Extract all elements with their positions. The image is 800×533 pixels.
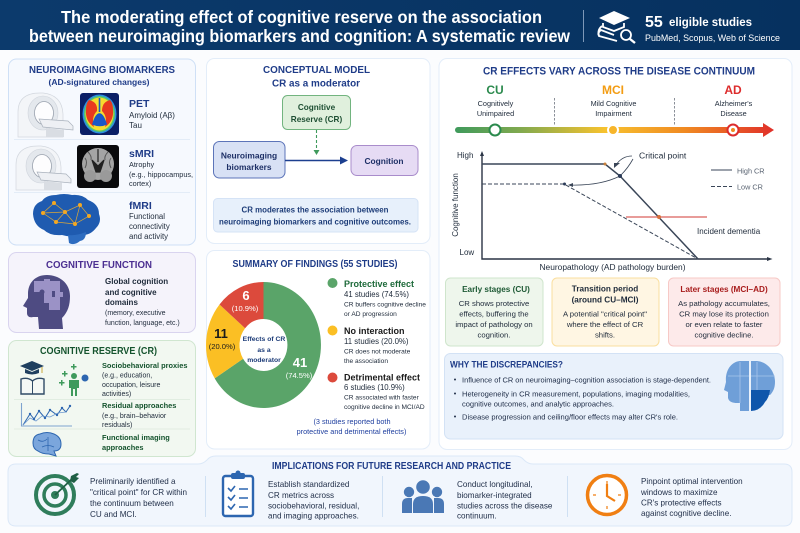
icon: blue brain: [33, 432, 61, 456]
donut chart: (20.0%): [209, 342, 236, 351]
PET label: Amyloid (Aβ): [129, 111, 175, 120]
dashed arrow: [314, 130, 320, 155]
stat: eligible studies: eligible studies: [669, 15, 752, 29]
box: neuroimaging biomarkers: biomarkers: [226, 162, 272, 172]
legend: no interaction: [328, 326, 411, 365]
chart: cognitive function vs neuropathology: Low: [460, 248, 474, 257]
box: neuroimaging biomarkers: [214, 142, 285, 178]
footnote: protective and detrimental effects): [297, 427, 406, 436]
sMRI label: sMRI: [129, 148, 154, 160]
stage labels: CU: [486, 83, 504, 97]
box: later stages: cognitive decline.: [695, 330, 753, 340]
legend: no interaction: the association: [344, 358, 388, 365]
stage labels: Cognitively: [478, 99, 514, 108]
box: later stages: CR may lose its protection: [679, 310, 769, 318]
chart: cognitive function vs neuropathology: Critical point: [639, 150, 687, 160]
box: early stages: impact of pathology on: [455, 320, 533, 329]
chart: cognitive function vs neuropathology: Cognitive function: [451, 173, 460, 237]
text: CR metrics: and imaging approaches.: [268, 512, 359, 520]
bullet list: Disease progression and ceiling/floor effects may alter CR's role.: [462, 412, 678, 422]
icon: person with plus signs: [59, 364, 88, 396]
text: critical point: Preliminarily identified a: [90, 477, 176, 486]
sMRI brain image: [77, 145, 119, 188]
box: transition period: A potential "critical point": [563, 310, 647, 318]
sociobehavioral text: activities): [102, 391, 131, 398]
panel: neuroimaging biomarkers: [8, 59, 196, 245]
PET label: Tau: [129, 121, 142, 130]
text: critical point: CU and MCI.: [90, 510, 137, 519]
heading: IMPLICATIONS FOR FUTURE RESEARCH AND PRACTICE: [272, 461, 511, 472]
panel: disease continuum: [439, 58, 792, 450]
chart: cognitive function vs neuropathology: [451, 150, 772, 272]
box: transition period: where the effect of CR: [566, 320, 644, 329]
text: CR metrics: CR metrics across: [268, 491, 334, 500]
chart: cognitive function vs neuropathology: Incident dementia: [697, 227, 761, 236]
heading: WHY THE DISCREPANCIES?: [450, 360, 563, 370]
cognitive function text: and cognitive: [105, 288, 157, 297]
legend: protective: CR buffers cognitive decline: [344, 302, 426, 308]
donut chart: (10.9%): [232, 304, 259, 313]
legend: protective: [328, 278, 426, 318]
stat: eligible studies: PubMed, Scopus, Web of Science: [645, 33, 780, 43]
text: CR metrics: sociobehavioral, residual,: [268, 502, 359, 510]
stat: eligible studies: 55: [645, 14, 663, 31]
bullet list: cognitive outcomes, and analytic approaches.: [462, 400, 614, 408]
heading: CR EFFECTS VARY ACROSS THE DISEASE CONTINUUM: [483, 66, 755, 78]
panel: cognitive function: [8, 252, 196, 332]
icon: cap and book: [20, 361, 44, 394]
sociobehavioral text: occupation, leisure: [102, 382, 160, 389]
box: cognitive reserve: Reserve (CR): [291, 115, 342, 124]
icon: residual chart: [22, 403, 72, 426]
donut chart: (74.5%): [286, 371, 313, 380]
functional imaging text: approaches: [102, 443, 144, 452]
text: longitudinal studies: Conduct longitudinal,: [457, 480, 533, 489]
icon: clock: [588, 476, 626, 514]
stage labels: Alzheimer's: [715, 99, 753, 108]
donut chart: Effects of CR: [243, 336, 285, 343]
text: longitudinal studies: continuum.: [457, 512, 497, 520]
stage labels: Disease: [720, 109, 747, 118]
sMRI label: (e.g., hippocampus,: [129, 170, 193, 179]
legend: no interaction: 11 studies (20.0%): [344, 337, 409, 346]
heading: NEUROIMAGING BIOMARKERS: [29, 65, 175, 76]
cognitive function text: Global cognition: [105, 277, 168, 286]
stage labels: Impairment: [595, 109, 632, 118]
box: neuroimaging biomarkers: Neuroimaging: [221, 150, 277, 160]
heading: COGNITIVE FUNCTION: [46, 260, 152, 271]
box: cognitive reserve: [282, 96, 350, 130]
donut chart: as a: [257, 347, 271, 354]
box: early stages: CR shows protective: [459, 299, 529, 308]
box: later stages: Later stages (MCI–AD): [680, 285, 768, 294]
fMRI label: and activity: [129, 232, 168, 241]
chart: cognitive function vs neuropathology: Low CR: [737, 182, 763, 192]
note: neuroimaging biomarkers and cognitive outcomes.: [219, 218, 411, 226]
box: early stages: [446, 278, 543, 346]
residual text: residuals): [102, 422, 132, 429]
note: [214, 198, 418, 232]
box: transition period: (around CU–MCI): [572, 296, 639, 304]
box: early stages: effects, buffering the: [459, 310, 529, 318]
arrow: [285, 156, 348, 164]
donut chart: moderator: [247, 357, 281, 364]
sMRI label: Atrophy: [129, 160, 154, 169]
panel: implications: [8, 456, 792, 526]
box: later stages: As pathology accumulates,: [678, 299, 770, 308]
cognitive function text: domains: [105, 298, 138, 307]
legend: detrimental: 6 studies (10.9%): [344, 383, 405, 392]
text: intervention windows: CR's protective effects: [641, 498, 722, 508]
text: critical point: the continuum between: [90, 499, 174, 508]
icon: head with puzzle: [23, 275, 70, 329]
icon: clipboard: [223, 470, 253, 516]
sociobehavioral text: Sociobehavioral proxies: [102, 361, 187, 370]
donut chart: 6: [242, 288, 250, 303]
sMRI label: cortex): [129, 179, 151, 188]
donut chart: 41: [293, 355, 307, 370]
legend: detrimental: [328, 372, 425, 411]
box: transition period: [552, 278, 659, 346]
sociobehavioral text: (e.g., education,: [102, 372, 152, 380]
panel: summary of findings: [206, 250, 430, 449]
box: cognition: [351, 146, 418, 176]
box: early stages: cognition.: [478, 330, 510, 340]
text: longitudinal studies: biomarker-integrated: [457, 491, 532, 500]
legend: detrimental: CR associated with faster: [344, 394, 420, 402]
text: CR metrics: Establish standardized: [268, 480, 349, 489]
donut chart: [206, 282, 321, 408]
cognitive function text: function, language, etc.): [105, 320, 180, 327]
fMRI label: Functional: [129, 212, 165, 221]
panel: cognitive reserve: [8, 340, 196, 456]
cognitive function text: (memory, executive: [105, 310, 166, 317]
box: cognitive reserve: Cognitive: [298, 103, 336, 112]
residual text: (e.g., brain–behavior: [102, 413, 167, 420]
residual text: Residual approaches: [102, 401, 176, 410]
fMRI label: fMRI: [129, 200, 152, 212]
legend: no interaction: No interaction: [344, 326, 405, 336]
PET label: PET: [129, 98, 150, 110]
continuum arrow: [455, 123, 774, 137]
icon: graduation cap with magnifier: [598, 11, 635, 43]
PET brain image: [80, 93, 119, 135]
icon: MRI scanner: [16, 146, 71, 190]
bullet list: Influence of CR on neuroimaging–cognition association is stage-dependent.: [462, 376, 711, 384]
stage labels: [477, 83, 753, 126]
heading: COGNITIVE RESERVE (CR): [40, 346, 157, 357]
legend: detrimental: cognitive decline in MCI/AD: [344, 404, 425, 411]
icon: people: [402, 480, 444, 513]
icon: target: [36, 473, 79, 514]
title: The moderating effect of cognitive reserve on the association: [61, 7, 542, 27]
chart: cognitive function vs neuropathology: High: [457, 151, 473, 160]
chart: cognitive function vs neuropathology: Neuropathology (AD pathology burden): [540, 263, 686, 272]
bullet list: Heterogeneity in CR measurement, populations, imaging modalities,: [462, 390, 690, 398]
heading: SUMMARY OF FINDINGS (55 STUDIES): [232, 259, 398, 270]
title: between neuroimaging biomarkers and cognition: A systematic review: [29, 26, 570, 46]
legend: detrimental: Detrimental effect: [344, 372, 420, 382]
box: early stages: Early stages (CU): [462, 285, 530, 294]
icon: fMRI brain network: [33, 194, 100, 244]
stage labels: Mild Cognitive: [591, 99, 636, 108]
legend: protective: or AD progression: [344, 311, 397, 318]
stage labels: Unimpaired: [477, 109, 514, 118]
box: transition period: Transition period: [572, 284, 638, 294]
stage labels: AD: [724, 83, 742, 97]
text: intervention windows: Pinpoint optimal intervention: [641, 477, 743, 486]
stage labels: MCI: [602, 83, 624, 97]
footnote: (3 studies reported both: [313, 417, 391, 426]
subheading: (AD-signatured changes): [48, 78, 150, 87]
text: longitudinal studies: studies across the disease: [457, 502, 553, 510]
heading: CR as a moderator: [272, 78, 360, 90]
fMRI label: connectivity: [129, 222, 170, 231]
box: cognition: Cognition: [364, 156, 404, 166]
heading: CONCEPTUAL MODEL: [263, 65, 370, 76]
icon: PET scanner: [18, 93, 73, 137]
note: CR moderates the association between: [242, 206, 389, 214]
text: critical point: "critical point" for CR within: [90, 488, 187, 497]
functional imaging text: Functional imaging: [102, 433, 170, 442]
chart: cognitive function vs neuropathology: High CR: [737, 166, 765, 176]
donut chart: 11: [214, 326, 228, 341]
box: later stages: [668, 278, 780, 346]
box: later stages: or even relate to faster: [686, 320, 763, 329]
icon: puzzle head: [724, 361, 775, 411]
header banner: [0, 0, 800, 50]
legend: no interaction: CR does not moderate: [344, 348, 411, 356]
panel: conceptual model: [206, 58, 430, 244]
box: transition period: shifts.: [595, 330, 615, 340]
text: intervention windows: windows to maximize: [640, 488, 718, 497]
text: intervention windows: against cognitive decline.: [641, 509, 731, 518]
panel: why the discrepancies: [444, 354, 783, 439]
legend: protective: 41 studies (74.5%): [344, 290, 409, 299]
legend: protective: Protective effect: [344, 279, 414, 289]
